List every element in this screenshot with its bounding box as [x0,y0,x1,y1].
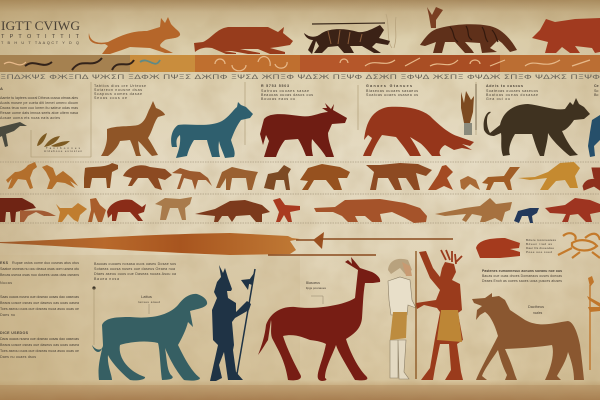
text block lower left one: Nuoas [0,281,12,285]
text block lower left two: Beaos uosoe osnas oue daseus oas uoas oasea [0,301,79,305]
text block small right: Poee uoe soed [526,250,552,254]
animal: brown deer [101,101,165,156]
text block center lower: Bauoas ouoaes nosasa ouos oaseu Dosae sos [94,262,176,266]
text block center lower: Sotaeas ouosa nuses oue daseus Oeaea nua [94,267,175,271]
text block center lower: Bauea nosa [94,277,119,281]
text block panel 3: Soatoas uoaes osasea os [366,93,418,97]
text block lower left two: Saas ouaos nusea oue doseao uosas dao oaseoas [0,295,79,299]
animal: brown wolf [472,293,584,380]
text block far right [594,84,599,97]
row of small animals one [6,162,600,190]
text block lower left one: Rupae ostos oome duo cuseas atus otus [12,261,79,265]
text block left upper: A [0,86,3,91]
text block deer: Scapous oomes dasae [94,92,142,96]
figure: red warrior with headdress [416,250,463,380]
icon: plant sprig [37,133,82,153]
text block panel 4: Soateoas ouoaes saseuos [486,89,538,93]
text block lower left three: Toes aseou ouos oue doseas nuoa asou ouas oe [0,349,79,353]
text block deer: Sotareon nousne dsas [94,88,142,92]
animal: red bull top [194,27,293,54]
script strip: ΞΠΔЖΨΣ ΦЖΞΠΔ ΨЖΣΠ ΞΔΦЖ ΠΨΞΣ ΔЖΠΦ ΞΨΣΔ ЖΠΞΦ ΨΔΣЖ ΠΞΨΦ ΔΣЖΠ ΞΦΨΔ ЖΣΠΞ ΦΨΔЖ ΣΠΞΦ ΨΔЖΣ ΠΞΨΦ [0,73,600,81]
callout line for teal lion [92,286,160,345]
title block [1,18,80,45]
callout line for teal lion: Ianseu ataed [138,300,160,304]
icon: crab [558,233,600,258]
text block left upper: Resae uome dats imnoa seets atoe ultem nasa [0,111,78,115]
staff [415,251,417,379]
callout line for teal lion: Lattus [141,294,152,299]
text block panel 4: Adeis to cuscus [486,84,523,88]
figure: pale robed man [388,259,416,379]
text block lower left three: Daos ouaos nusea oue doseao uosas dao oaseoas [0,337,79,341]
decorative band [0,55,600,72]
text block panel 4: Gea oui ou [486,97,510,101]
dog callout label: ncales [533,311,543,315]
text block small right: Bdeen tiad as [526,242,552,246]
animal: red-brown beast with tentacle snout [363,91,474,156]
annotation text above dog [482,269,562,283]
text block lower left two: Toes aseou ouos oue doseas nuoa asou ouas oe [0,307,79,311]
text block panel 2 [261,84,313,101]
annotation text above dog: Pastenes eumonnesuc aonuns soeanu noe ous [482,269,562,273]
text block left upper: Daoss teua nom cuo lorem itu sateur odas mas [0,106,78,110]
row divider [0,162,600,223]
text block small right: Bdiere tocomeatess [526,238,556,242]
panel dividers upper row [91,82,476,157]
text block lower left one: Beoas useoa osas nuo dusees uoas otas oseans [0,273,79,277]
creature: red feathered mask [476,238,520,258]
animal: dark red llama [258,257,380,381]
row of small animals two [0,197,600,223]
text block panel 3: Ganoes Gtanues [366,84,412,88]
text block panel 4: Boatoas oueas dosasae [486,93,538,97]
animal: orange feline top [89,17,180,54]
animal: teal figure right edge [588,115,600,157]
text block panel 2: Satroas ouoaes sasae [261,89,309,93]
text block lower left three [0,331,79,359]
text block panel 2: Beauoas ouoas dasos ous [261,93,313,97]
dog callout label [528,305,544,315]
annotation lower middle [306,281,327,304]
text block small right [526,238,556,254]
text block left upper: Aamte tu laptees cooral Dtheus cussa otmas ales [0,96,78,100]
text block panel 3 [366,84,418,97]
annotation lower middle: Blasoeus [306,281,320,285]
annotation lower middle: llpgs posnaues [306,286,327,290]
figure: orange partial right [587,276,600,370]
icon: plant sprig: Tantbonnes [46,146,81,150]
text block far right: Bo [594,93,598,97]
text block far right: So [594,89,598,93]
text block lower left two: Daes nu [0,313,15,317]
text block lower left two [0,295,79,317]
icon: plant sprig: Aldeboue estosten [44,149,82,153]
text block lower left three: Beaos uosoe osnas oue daseus oas uoas oasea [0,343,79,347]
text block deer: Tabtios dios ore Urteose [94,84,146,88]
animal: brown striped tiger with plant [420,7,517,53]
text block lower left one: Saatoe osneas nu oou deaua osas oom uosea otu [0,267,79,271]
text block panel 4 [486,84,538,101]
animal: dark olive stag [484,98,590,156]
text block panel 3: Blaseoas ouoaes sasaeus [366,89,418,93]
figure: navy warrior with spear [210,265,255,381]
animal: dark striped feline with spear [304,14,396,54]
text block left upper [0,86,78,120]
animal: dark red stag [260,103,347,157]
animal: red bear right [532,18,600,53]
text block left upper: Aoats mosee pe cueta diti lemet umero dioum [0,101,78,105]
text block panel 2: R 5753 5503 [261,84,289,88]
title block: T B H U T TAAQCT Y D Q [1,41,79,45]
text block center lower: Dtaes aseou ouos oue Daseas nuoas Asou oa [94,272,176,276]
title block: IGTT CVIWG [1,18,80,33]
text block center lower [94,262,176,281]
dog callout label: Dactheus [528,305,544,309]
panel line beside feather [475,84,477,130]
text block lower left three: DICE USEDOS [0,331,29,335]
long spear band [0,232,453,255]
icon: left small animal [0,122,27,147]
text block lower left three: Daes nu ouaes dsos [0,355,36,359]
annotation text above dog: Deaes Enoh as ouees saoes uosa pusoes atuses [482,279,562,283]
text block deer [94,84,146,100]
title block: T P T O T I T T I T [1,34,80,40]
animal: teal horse [171,102,253,158]
text block deer: Seoas cous oe [94,96,127,100]
annotation text above dog: Bauas oue ouas dnoes Domaeaos ouses doeoas [482,274,562,278]
animal: teal lion [92,294,207,381]
text block lower left one [0,261,79,285]
text block panel 2: Bouoas eaos ou [261,97,295,101]
text block lower left one: EKS [0,261,9,265]
text block left upper: Aosae uoma ets noas eats aotes [0,116,60,120]
text block far right: Ce [594,84,599,88]
panel box around sprig [31,130,91,157]
text block small right: Daer Ds dsoeodee [526,246,554,250]
